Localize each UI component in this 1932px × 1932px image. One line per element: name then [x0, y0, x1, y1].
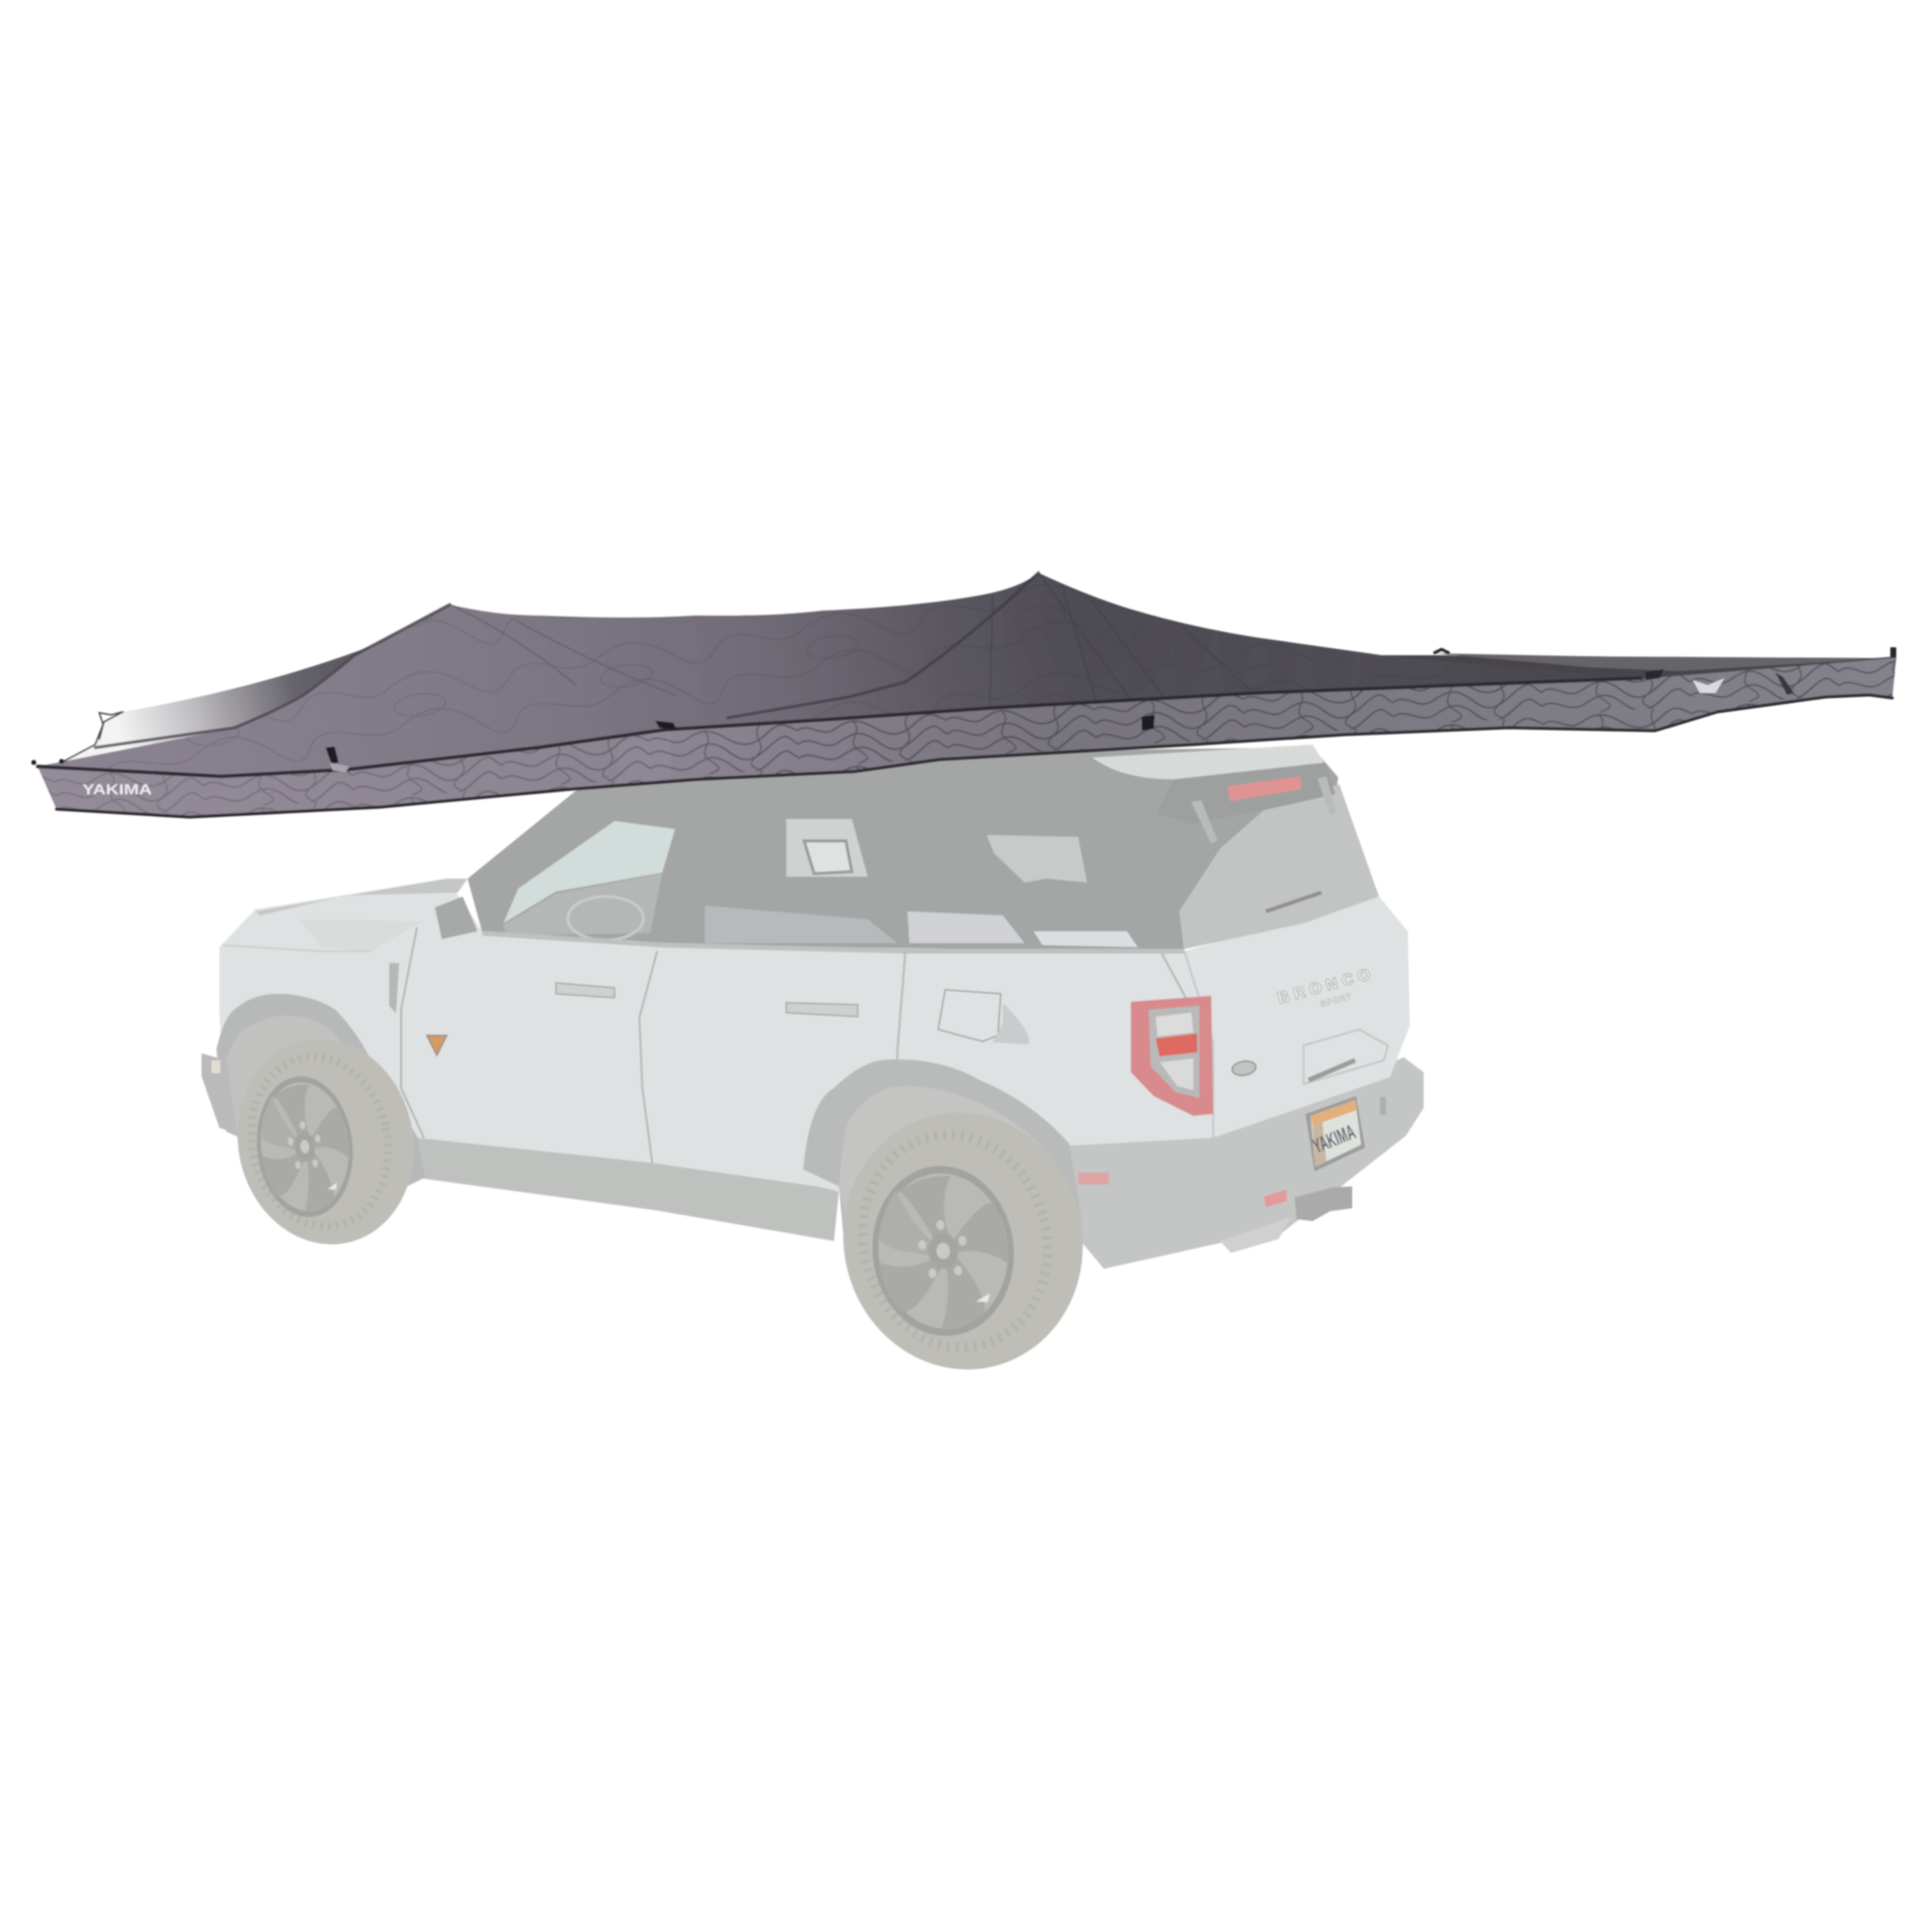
- tail light: [1131, 996, 1213, 1116]
- valance corner panel: [618, 728, 671, 784]
- wiper: [1266, 893, 1321, 911]
- roof panel: [1092, 745, 1325, 779]
- Bronco badge text: SPORT: [1319, 992, 1353, 1009]
- left logo: YAKIMA: [82, 781, 152, 798]
- front wheel: [218, 1023, 433, 1261]
- rear wheel well: [839, 1086, 1072, 1251]
- rear bumper sensor: [1380, 1097, 1386, 1115]
- dashboard and steering wheel: [503, 874, 662, 940]
- fuel door: [938, 990, 1001, 1041]
- licence plate: [1306, 1096, 1365, 1172]
- body shell: [219, 879, 1410, 1191]
- rear side window: [987, 835, 1087, 883]
- front wheel arch: [216, 994, 425, 1191]
- right sliver panel: [1433, 653, 1891, 671]
- translucent mesh corner: [64, 605, 450, 761]
- fender vent: [389, 963, 399, 1014]
- door handles: [556, 983, 858, 1017]
- badge: [427, 1035, 447, 1055]
- spoiler tabs: [1191, 776, 1336, 844]
- faint topographic print on canopy top: [38, 573, 1642, 776]
- belt trim panels: [705, 905, 1138, 947]
- spare tyre shadow and hitch: [1220, 1186, 1352, 1253]
- windshield: [503, 821, 675, 923]
- right logo mark: [1693, 678, 1725, 693]
- door seams: [401, 927, 1213, 1210]
- door window with mirror: [786, 819, 868, 877]
- Ford oval: [1231, 1059, 1257, 1077]
- bumper reflectors: [1078, 1173, 1287, 1207]
- hood: [222, 879, 468, 951]
- tailgate outline and handle recess: [1184, 951, 1388, 1138]
- valance band: [38, 657, 1896, 817]
- front bumper with marker: [202, 1053, 237, 1134]
- canopy dark peak shading: [38, 573, 1642, 776]
- brake light: [1227, 776, 1301, 801]
- awning canopy: [32, 573, 1896, 817]
- hem lines: [38, 657, 1895, 817]
- rear wheel: [816, 1087, 1110, 1395]
- canopy top panel: [38, 573, 1642, 776]
- rear bumper: [1069, 1057, 1424, 1269]
- front wheel well: [226, 1016, 396, 1181]
- left valance print fade: [38, 720, 855, 817]
- vehicle: faded SUV: [202, 745, 1424, 1395]
- sill: [417, 1138, 839, 1241]
- Bronco badge text: BRONCO: [1276, 965, 1377, 1008]
- quarter panel shadow: [993, 1003, 1029, 1044]
- rear wheel arch: [803, 1059, 1082, 1241]
- licence plate: YAKIMA: [1310, 1121, 1359, 1159]
- clips and tabs: [32, 647, 1896, 772]
- greenhouse: dark roof and pillars: [468, 748, 1338, 951]
- canopy folds and seams: [95, 573, 1253, 748]
- belt line: [483, 933, 1184, 951]
- right dark underside: [1382, 655, 1891, 679]
- side mirror: [435, 897, 478, 939]
- topographic print on valance: [38, 657, 1896, 817]
- rear glass: [1179, 784, 1379, 949]
